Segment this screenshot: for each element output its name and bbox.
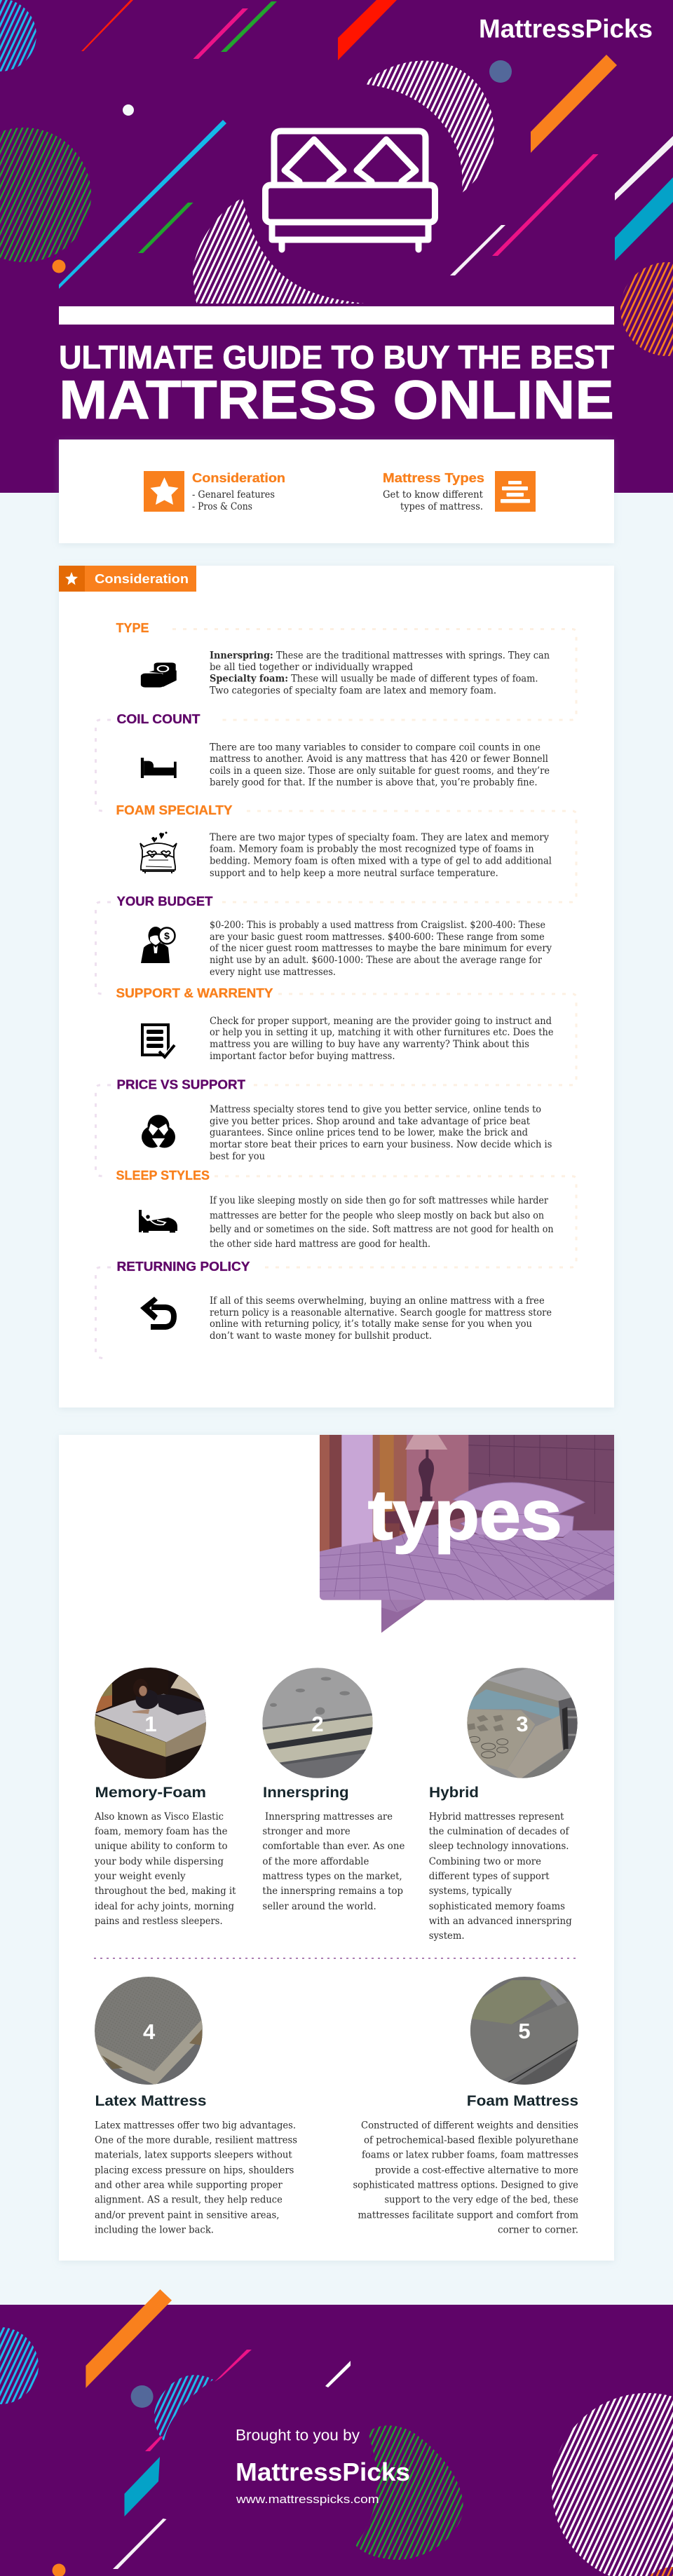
type: foam mattress: of petrochemical-based flexible polyurethane: [364, 2135, 578, 2146]
type: innerspring: seller around the world.: [262, 1901, 376, 1912]
type: hybrid: Hybrid mattresses represent: [429, 1811, 564, 1822]
section: price vs support: best for you: [210, 1151, 265, 1162]
consideration summary: Consideration: [192, 471, 285, 485]
section: your budget: are your basic guest room mattresses. $400-600: These range from some: [210, 932, 545, 943]
white bar: [59, 306, 614, 325]
type: hybrid: [429, 1785, 572, 1942]
dashed connector path: [95, 629, 576, 1358]
type: latex mattress: including the lower back.: [95, 2225, 214, 2236]
type: memory foam: throughout the bed, making it: [95, 1886, 236, 1897]
type: memory foam: unique ability to conform to: [95, 1841, 228, 1852]
consideration summary: - Pros & Cons: [192, 501, 252, 512]
type: memory foam: ideal for achy joints, morning: [95, 1901, 234, 1912]
section: your budget: every night use mattresses.: [210, 967, 336, 978]
section: sleep styles: SLEEP STYLES: [116, 1168, 210, 1183]
section: price vs support: Mattress specialty stores tend to give you better service, online tends to: [210, 1104, 541, 1115]
section: foam specialty: support and to help keep a more neutral surface temperature.: [210, 868, 498, 879]
section: coil count: barely good for that. If the number is above that, you’re probably fine.: [210, 777, 537, 789]
section: price vs support: give you better prices. Shop around and take advantage of price beat: [210, 1116, 531, 1127]
mattress types summary: types of mattress.: [400, 501, 483, 512]
consideration summary: [192, 471, 285, 512]
type: latex mattress: [95, 2093, 297, 2236]
section: coil count: COIL COUNT: [116, 712, 200, 726]
section: your budget: YOUR BUDGET: [116, 894, 213, 908]
mattress types summary: [383, 471, 484, 512]
section: coil count: [116, 712, 550, 789]
circle photo: memory foam: 1: [144, 1712, 157, 1736]
type: foam mattress: mattresses facilitate support and comfort from: [358, 2210, 578, 2221]
type: innerspring: mattress types on the market,: [262, 1871, 402, 1882]
type: hybrid: sophisticated memory foams: [429, 1901, 565, 1912]
section: foam specialty: bedding. Memory foam is often mixed with a type of gel to add additional: [210, 856, 552, 867]
type: foam mattress: foams or latex rubber foams, foam mattresses: [362, 2150, 578, 2161]
section: sleep styles: the other side hard mattress are good for health.: [210, 1239, 430, 1250]
section: coil count: mattress to another. Avoid is any mattress that has 420 or fewer Bonnell: [210, 754, 548, 765]
circle photo: latex: 4: [143, 2019, 156, 2044]
photo: bed speech bubble: types: [368, 1476, 562, 1554]
section: type: [116, 621, 550, 697]
type: latex mattress: materials, latex supports sleepers without: [95, 2150, 292, 2161]
type: hybrid: Combining two or more: [429, 1856, 541, 1867]
section: sleep styles: [116, 1168, 554, 1250]
logo: MattressPicks: [479, 14, 653, 43]
section: your budget: night use by an adult. $600-1000: These are about the average range for: [210, 955, 543, 966]
consideration badge: Consideration: [95, 572, 189, 586]
consideration summary: - Genarel features: [192, 489, 275, 500]
photo: bed speech bubble: [320, 1435, 614, 1633]
section: your budget: of the nicer guest room mattresses to maybe the bare minimum for every: [210, 943, 552, 954]
type: latex mattress: Latex mattresses offer two big advantages.: [95, 2120, 296, 2132]
section: price vs support: PRICE VS SUPPORT: [116, 1077, 245, 1091]
icon: sketched bed with hearts: [140, 831, 177, 873]
type: innerspring: Innerspring mattresses are: [265, 1811, 393, 1822]
type: foam mattress: Foam Mattress: [467, 2093, 578, 2109]
circle photo: memory foam: [95, 1668, 206, 1779]
section: price vs support: mortar store beat their prices to earn your business. Now decide which is: [210, 1139, 552, 1150]
icon: venn diagram: [142, 1115, 175, 1148]
section: support and warrenty: [116, 986, 554, 1062]
section: support and warrenty: SUPPORT & WARRENTY: [116, 986, 273, 1000]
icon: person with coin: [141, 927, 175, 963]
type: latex mattress: and other area while supporting proper: [95, 2180, 283, 2191]
type: foam mattress: Constructed of different weights and densities: [361, 2120, 578, 2132]
type: innerspring: stronger and more: [262, 1826, 351, 1837]
title: ULTIMATE GUIDE TO BUY THE BEST: [59, 339, 614, 376]
footer decorative shapes: [0, 2289, 673, 2576]
type: memory foam: Also known as Visco Elastic: [94, 1811, 224, 1822]
type: foam mattress: sophisticated mattress options. Designed to give: [353, 2180, 578, 2191]
circle photo: innerspring: [262, 1668, 373, 1778]
section: sleep styles: mattresses are better for the people who sleep mostly on back but also on: [210, 1210, 544, 1221]
type: foam mattress: [353, 2093, 578, 2236]
consideration badge: [59, 566, 196, 592]
section: your budget: [116, 894, 552, 978]
section: coil count: coils in a queen size. Those are only suitable for guest rooms, and they’re: [210, 765, 550, 777]
section: returning policy: RETURNING POLICY: [116, 1260, 250, 1274]
type: foam mattress: provide a cost-effective alternative to more: [375, 2165, 578, 2176]
credit text: [236, 2427, 410, 2506]
section: returning policy: [116, 1260, 552, 1342]
section: price vs support: [116, 1077, 552, 1162]
panel: types: [59, 1435, 614, 2261]
type: hybrid: with an advanced innerspring: [429, 1916, 572, 1927]
credit text: Brought to you by: [236, 2427, 360, 2444]
icon: person with coin: $: [164, 930, 170, 941]
footer banner: [0, 2289, 673, 2576]
type: memory foam: foam, memory foam has the: [95, 1826, 228, 1837]
section: returning policy: online with returning policy, it’s totally make sense for you when you: [210, 1318, 532, 1330]
icon: foam and pillow: [141, 662, 177, 688]
header banner: [0, 0, 673, 493]
icon: person sleeping: [139, 1210, 177, 1232]
circle photo: hybrid: 3: [516, 1712, 529, 1736]
type: hybrid: the culmination of decades of: [429, 1826, 569, 1837]
section: support and warrenty: important factor befor buying mattress.: [210, 1051, 395, 1062]
icon: bed silhouette: [141, 758, 177, 778]
type: innerspring: [262, 1785, 405, 1912]
type: latex mattress: alignment. AS a result, they help reduce: [95, 2195, 283, 2206]
section: foam specialty: foam. Memory foam is probably the most recognized type of foams in: [210, 844, 534, 855]
section: type: Innerspring: These are the traditional mattresses with springs. They can: [210, 650, 550, 662]
icon: checklist document: [141, 1023, 175, 1057]
credit text: MattressPicks: [236, 2458, 410, 2486]
section: returning policy: return policy is a reasonable alternative. Search google for mattress store: [210, 1307, 552, 1318]
section: sleep styles: belly and or sometimes on the side. Soft mattress are not good for health on: [210, 1224, 554, 1235]
section: price vs support: guarantees. Since online prices tend to be lower, make the brick and: [210, 1127, 528, 1138]
credit text: www.mattresspicks.com: [236, 2493, 379, 2506]
section: type: TYPE: [116, 621, 149, 635]
type: innerspring: of the more affordable: [262, 1856, 369, 1867]
section: sleep styles: If you like sleeping mostly on side then go for soft mattresses while harder: [210, 1195, 549, 1206]
section: foam specialty: FOAM SPECIALTY: [116, 803, 233, 817]
panel: consideration: [59, 566, 614, 1408]
section: support and warrenty: Check for proper support, meaning are the provider going to instruct and: [210, 1016, 552, 1027]
mattress types summary: Get to know different: [383, 489, 484, 500]
type: innerspring: Innerspring: [263, 1785, 349, 1801]
type: foam mattress: support to the very edge of the bed, these: [384, 2195, 578, 2206]
section: your budget: $0-200: This is probably a used mattress from Craigslist. $200-400: These: [210, 920, 545, 931]
type: hybrid: different types of support: [429, 1871, 550, 1882]
decorative shapes: [0, 0, 673, 356]
type: memory foam: pains and restless sleepers.: [95, 1916, 223, 1927]
section: support and warrenty: or help you in setting it up, matching it with other furnitures etc. Does the: [210, 1027, 554, 1038]
icon: bed: [265, 131, 435, 250]
type: memory foam: Memory-Foam: [95, 1785, 206, 1801]
type: latex mattress: One of the more durable, resilient mattress: [95, 2135, 297, 2146]
title: [59, 339, 614, 430]
icon: stack square: [495, 471, 536, 512]
circle photo: foam: [470, 1977, 578, 2085]
circle photo: latex: [95, 1977, 203, 2085]
section: type: Specialty foam: These will usually be made of different types of foam.: [210, 674, 538, 685]
section: returning policy: If all of this seems overwhelming, buying an online mattress with a free: [210, 1295, 545, 1307]
circle photo: foam: 5: [518, 2019, 531, 2043]
title: MATTRESS ONLINE: [59, 369, 614, 430]
circle photo: hybrid: [467, 1668, 578, 1778]
circle photo: innerspring: 2: [311, 1712, 324, 1736]
type: hybrid: sleep technology innovations.: [429, 1841, 569, 1852]
type: hybrid: system.: [429, 1930, 465, 1942]
panel: contents: [59, 439, 614, 543]
type: latex mattress: placing excess pressure on hips, shoulders: [95, 2165, 294, 2176]
type: memory foam: your body while dispersing: [94, 1856, 224, 1867]
section: type: be all tied together or individually wrapped: [210, 662, 413, 673]
type: memory foam: [94, 1785, 236, 1927]
section: support and warrenty: mattress you are willing to buy have any warrenty? Think about this: [210, 1039, 529, 1050]
section: returning policy: don’t want to waste money for bullshit product.: [210, 1330, 432, 1342]
type: latex mattress: and/or prevent paint in sensitive areas,: [95, 2210, 279, 2221]
icon: star square: [144, 471, 184, 512]
type: hybrid: systems, typically: [429, 1886, 512, 1897]
type: latex mattress: Latex Mattress: [95, 2093, 206, 2109]
type: innerspring: comfortable than ever. As one: [262, 1841, 405, 1852]
icon: return arrow: [140, 1297, 174, 1327]
type: hybrid: Hybrid: [429, 1785, 479, 1801]
type: foam mattress: corner to corner.: [498, 2225, 578, 2236]
type: memory foam: your weight evenly: [94, 1871, 186, 1882]
section: coil count: There are too many variables to consider to compare coil counts in one: [210, 742, 541, 754]
section: type: Two categories of specialty foam are latex and memory foam.: [210, 686, 496, 697]
section: foam specialty: [116, 803, 552, 879]
mattress types summary: Mattress Types: [383, 471, 484, 485]
type: innerspring: the innerspring remains a top: [262, 1886, 403, 1897]
section: foam specialty: There are two major types of specialty foam. They are latex and memory: [210, 832, 549, 843]
